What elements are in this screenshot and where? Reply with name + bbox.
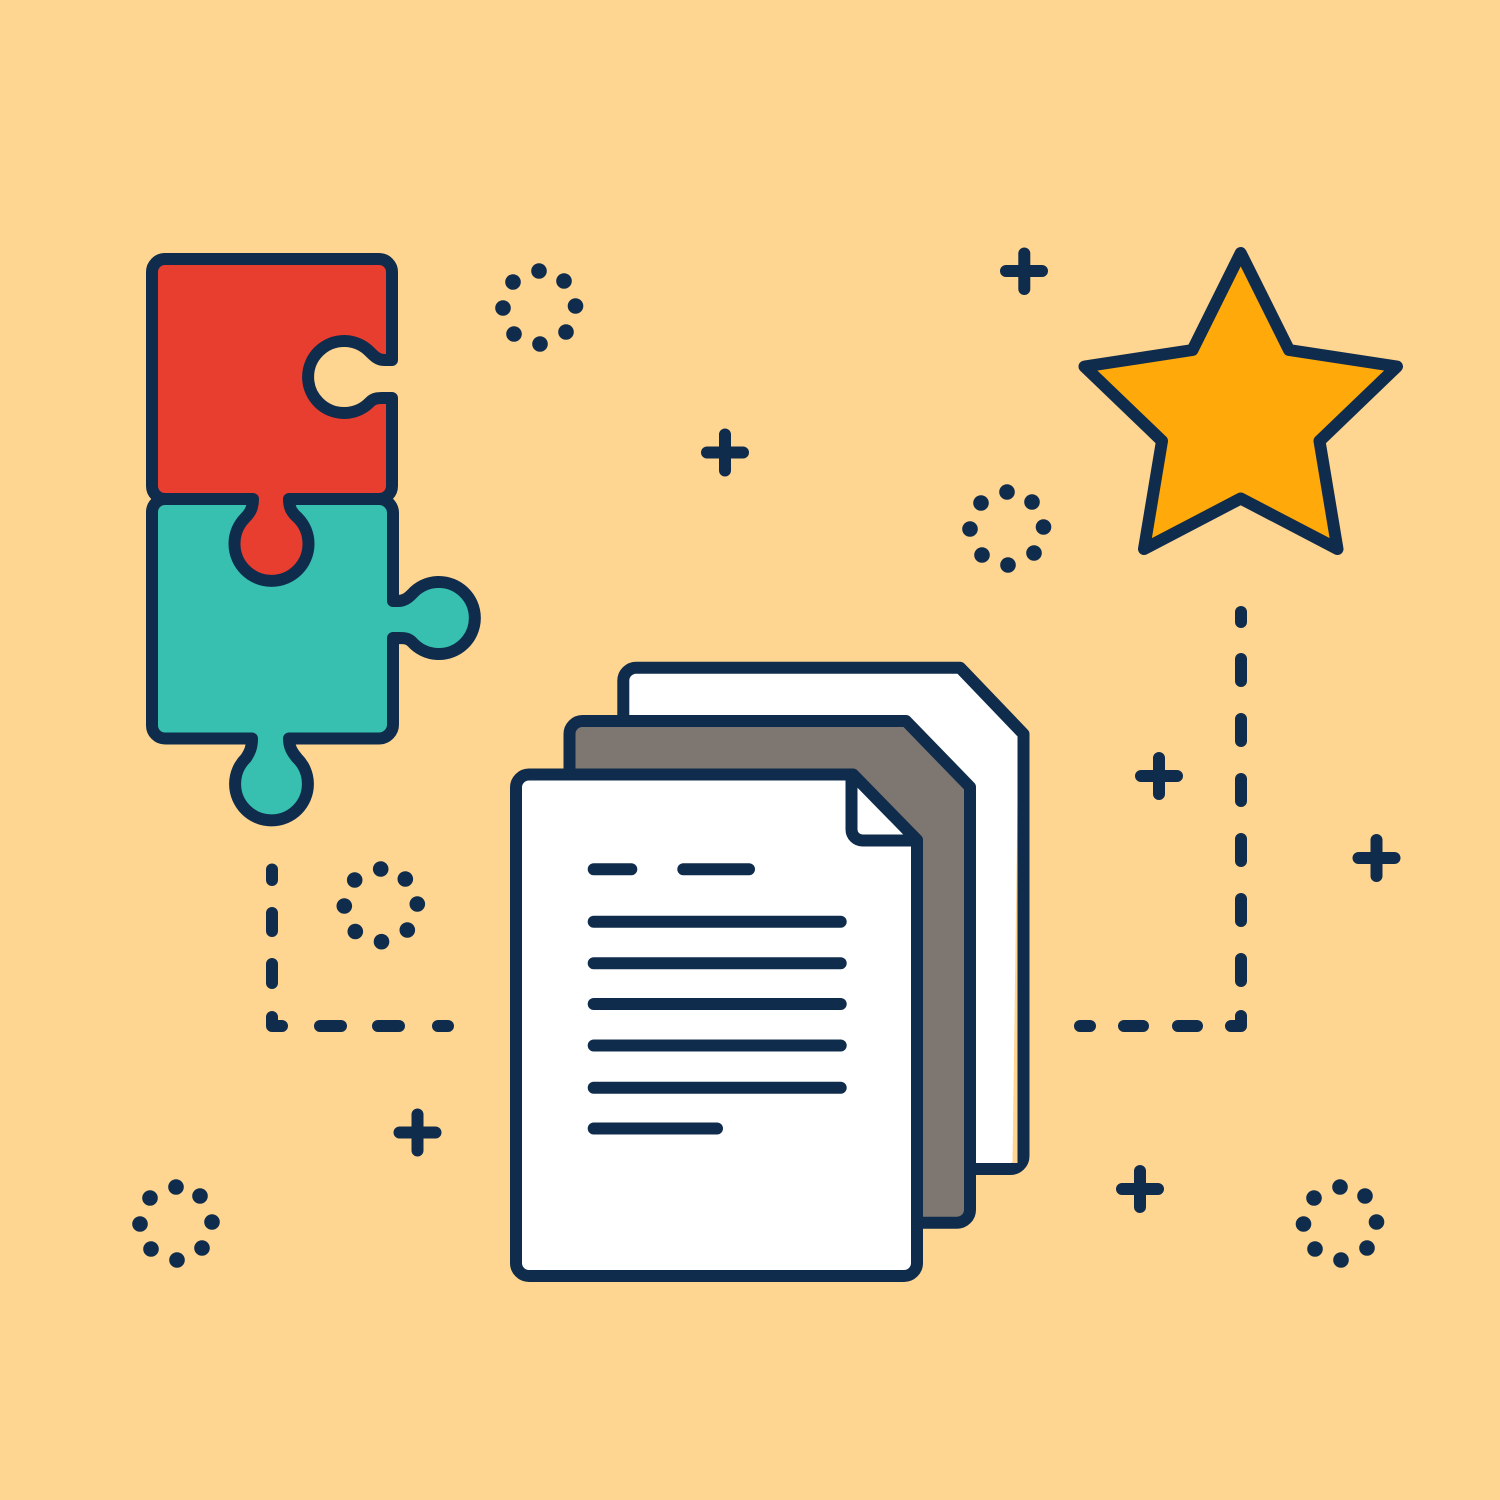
document text lines — [594, 869, 841, 1128]
dotted circle: beside left connector — [336, 861, 425, 950]
arrow: dashed connector from puzzle to document — [272, 870, 448, 1026]
arrow: dashed connector from document to star — [1080, 612, 1241, 1026]
icon: plus signs — [400, 254, 1394, 1207]
dotted circle: bottom right — [1296, 1179, 1384, 1268]
icon: dotted circles — [132, 263, 1384, 1268]
dotted circle: below star — [962, 484, 1051, 573]
icon: back document — [623, 668, 1024, 1169]
icon: red puzzle piece — [152, 259, 392, 581]
icon: teal puzzle piece — [152, 499, 475, 820]
dotted circle: top centre — [495, 263, 583, 352]
icon: front document — [516, 774, 917, 1276]
dotted circle: bottom left — [132, 1179, 220, 1268]
icon: middle document — [570, 721, 970, 1223]
icon: star — [1084, 253, 1397, 549]
